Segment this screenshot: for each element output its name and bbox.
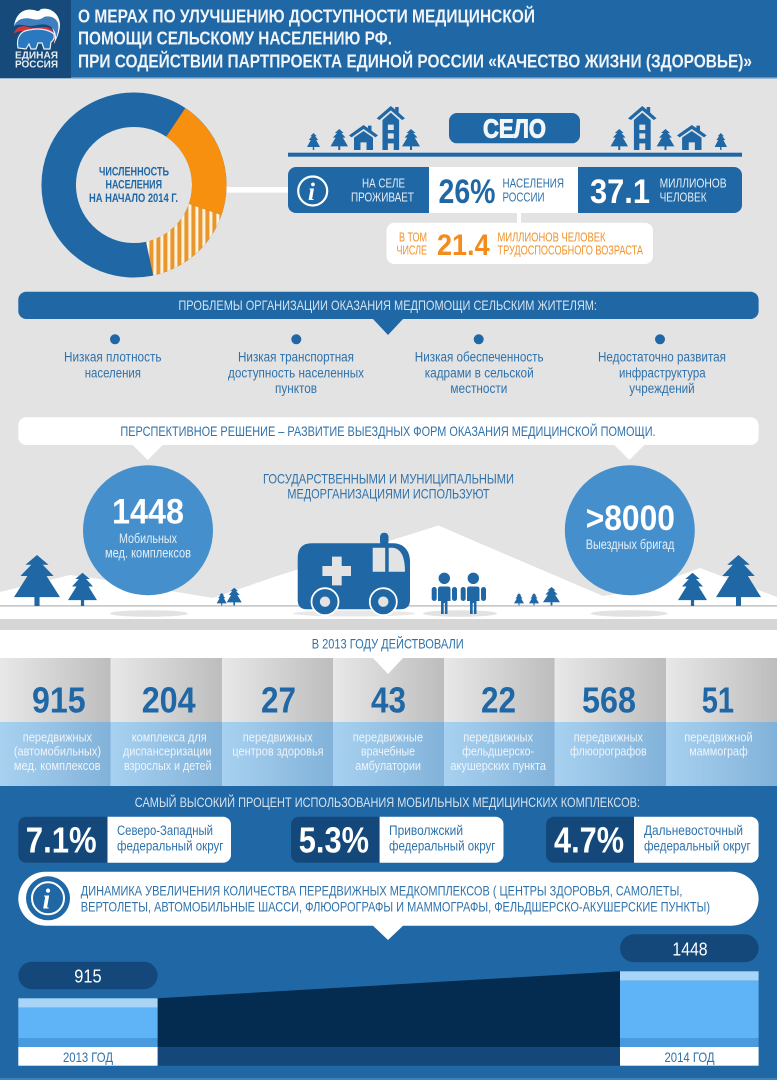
problem 2: Низкая транспортная bbox=[238, 350, 354, 364]
village scene: right houses and trees bbox=[610, 106, 727, 150]
problem 1: населения bbox=[85, 365, 141, 380]
grey strip bbox=[0, 619, 777, 630]
problem 1 bbox=[64, 334, 162, 380]
snowy hills bbox=[0, 526, 777, 606]
circle stat: mobile complexes bbox=[83, 465, 213, 595]
column: 22: акушерских пункта bbox=[450, 758, 547, 773]
problem 4: Недостаточно развитая bbox=[598, 350, 726, 364]
column: 204 bbox=[110, 658, 222, 786]
pointer triangle bbox=[373, 658, 403, 674]
circle stat: field teams bbox=[565, 465, 695, 595]
circle stat: mobile complexes: 1448 bbox=[112, 492, 184, 531]
ground line bbox=[288, 153, 742, 157]
icon: info bbox=[26, 876, 70, 920]
icon: info bbox=[298, 176, 327, 206]
info bar: rural population: НА СЕЛЕ bbox=[362, 176, 405, 190]
column: 43 bbox=[333, 658, 444, 786]
problem 3 bbox=[415, 334, 544, 396]
callout: working age population: В ТОМ bbox=[399, 230, 427, 244]
circle stat: mobile complexes: мед. комплексов bbox=[105, 546, 191, 560]
panel: problems heading: ПРОБЛЕМЫ ОРГАНИЗАЦИИ ОКАЗАНИЯ МЕДПОМОЩИ СЕЛЬСКИМ ЖИТЕЛЯМ: bbox=[178, 297, 597, 313]
problem 3: местности bbox=[450, 381, 507, 396]
problem 3: Низкая обеспеченность bbox=[415, 350, 544, 364]
snowy ground bbox=[0, 605, 777, 619]
stat: 5.3% bbox=[291, 817, 504, 863]
central caption: ГОСУДАРСТВЕННЫМИ И МУНИЦИПАЛЬНЫМИ bbox=[263, 470, 514, 486]
stat: 4.7%: 4.7% bbox=[554, 820, 624, 861]
column: 915 bbox=[0, 658, 110, 786]
column: 27: центров здоровья bbox=[232, 744, 324, 758]
village label bbox=[449, 113, 580, 144]
value pill: 1448: 1448 bbox=[672, 940, 708, 960]
column: 43: амбулатории bbox=[355, 758, 421, 773]
logo: Единая Россия: РОССИЯ bbox=[15, 60, 58, 70]
growth wedge bbox=[158, 971, 620, 1047]
column: 915: передвижных bbox=[23, 730, 92, 744]
column: 51 bbox=[666, 658, 777, 786]
bar: 2014: 2014 ГОД bbox=[664, 1049, 715, 1065]
column: 204: взрослых и детей bbox=[124, 758, 212, 773]
info bar: rural population: 37.1 bbox=[590, 173, 650, 211]
stat: 5.3%: Приволжский bbox=[389, 823, 463, 838]
donut caption: НАСЕЛЕНИЯ bbox=[106, 178, 162, 192]
chart: growth 2013 to 2014 bbox=[18, 934, 759, 1066]
column: 22 bbox=[444, 658, 554, 786]
stat: 5.3%: 5.3% bbox=[299, 820, 369, 861]
donut caption bbox=[89, 164, 178, 205]
column: 43: врачебные bbox=[361, 744, 415, 758]
icon: people bbox=[432, 573, 486, 614]
column: 27: передвижных bbox=[243, 730, 313, 744]
title: ПОМОЩИ СЕЛЬСКОМУ НАСЕЛЕНИЮ РФ. bbox=[78, 28, 392, 49]
column: 43: передвижные bbox=[353, 730, 423, 744]
problem 2: доступность населенных bbox=[228, 365, 364, 380]
column: 51: передвижной bbox=[684, 730, 753, 744]
bar: 2013 bbox=[18, 998, 158, 1066]
logo: Единая Россия bbox=[14, 9, 60, 71]
stat: 4.7%: Дальневосточный bbox=[644, 823, 743, 838]
stat: 7.1%: Северо-Западный bbox=[117, 823, 213, 838]
title: О МЕРАХ ПО УЛУЧШЕНИЮ ДОСТУПНОСТИ МЕДИЦИНСКОЙ bbox=[78, 6, 535, 27]
column: 22: фельдшерско- bbox=[462, 744, 534, 758]
donut caption: НА НАЧАЛО 2014 Г. bbox=[89, 191, 178, 205]
header banner bbox=[0, 0, 777, 78]
info bar: rural population: НАСЕЛЕНИЯ bbox=[502, 176, 564, 190]
callout: working age population: 21.4 bbox=[437, 229, 490, 262]
circle stat: mobile complexes: Мобильных bbox=[119, 531, 177, 546]
column: 43: 43 bbox=[371, 680, 406, 721]
stat: 5.3%: федеральный округ bbox=[389, 838, 496, 853]
logo: Единая Россия: ЕДИНАЯ bbox=[15, 50, 58, 62]
callout: dynamics bbox=[18, 872, 759, 940]
stat: 4.7%: федеральный округ bbox=[644, 838, 751, 853]
circle stat: field teams: >8000 bbox=[586, 499, 675, 538]
central caption: МЕДОРГАНИЗАЦИЯМИ ИСПОЛЬЗУЮТ bbox=[287, 485, 490, 501]
panel: problems heading bbox=[18, 292, 759, 335]
panel: usage and dynamics bbox=[0, 786, 777, 1080]
problem 4 bbox=[598, 334, 726, 396]
column: 22: передвижных bbox=[463, 730, 533, 744]
donut segment: orange bbox=[166, 108, 227, 215]
bar: 2014 bbox=[620, 971, 759, 1066]
trees: right bbox=[514, 555, 761, 606]
connector line: donut to info bar bbox=[222, 187, 290, 193]
column: 915: (автомобильных) bbox=[14, 744, 101, 758]
donut caption: ЧИСЛЕННОСТЬ bbox=[99, 164, 169, 178]
info bar: rural population: РОССИИ bbox=[502, 190, 544, 204]
donut segment: hatched bbox=[146, 204, 222, 276]
village label: СЕЛО bbox=[483, 114, 546, 144]
callout: working age population: ТРУДОСПОСОБНОГО ВОЗРАСТА bbox=[498, 244, 643, 258]
bar: 2013: 2013 ГОД bbox=[63, 1049, 113, 1065]
callout: working age population: ЧИСЛЕ bbox=[396, 244, 427, 258]
problem 2: пунктов bbox=[275, 381, 317, 396]
column: 568: передвижных bbox=[574, 730, 643, 744]
column: 915: 915 bbox=[32, 680, 86, 721]
column: 204: 204 bbox=[142, 680, 196, 721]
problem 4: инфраструктура bbox=[619, 365, 706, 380]
problem 4: учреждений bbox=[629, 381, 695, 396]
column: 915: мед. комплексов bbox=[14, 758, 101, 773]
icon: info: i bbox=[308, 179, 315, 206]
column: 27: 27 bbox=[261, 680, 296, 721]
stat: 4.7% bbox=[546, 817, 759, 863]
column: 568: флюорографов bbox=[570, 744, 647, 758]
problem 1: Низкая плотность bbox=[64, 350, 162, 364]
title bbox=[78, 6, 752, 71]
stat: 7.1%: 7.1% bbox=[26, 820, 97, 861]
donut chart bbox=[59, 108, 227, 275]
panel: promising solution bbox=[18, 417, 759, 460]
trees: left bbox=[14, 555, 242, 606]
info bar: rural population: ПРОЖИВАЕТ bbox=[351, 190, 414, 204]
circle stat: field teams: Выездных бригад bbox=[586, 537, 674, 552]
column: 568 bbox=[554, 658, 666, 786]
value pill: 915 bbox=[18, 962, 158, 989]
heading: В 2013 ГОДУ ДЕЙСТВОВАЛИ bbox=[312, 634, 464, 652]
column: 204: комплекса для bbox=[132, 730, 207, 744]
icon: ambulance bbox=[298, 533, 410, 615]
column: 568: 568 bbox=[582, 680, 636, 721]
heading: highest usage: САМЫЙ ВЫСОКИЙ ПРОЦЕНТ ИСПОЛЬЗОВАНИЯ МОБИЛЬНЫХ МЕДИЦИНСКИХ КОМПЛЕКСОВ: bbox=[135, 793, 640, 810]
panel: 2013 statistics bbox=[0, 630, 777, 786]
stat: 7.1%: федеральный округ bbox=[117, 838, 224, 853]
column: 51: маммограф bbox=[689, 744, 748, 758]
problem 2 bbox=[228, 334, 364, 396]
column: 51: 51 bbox=[702, 680, 734, 721]
value pill: 1448 bbox=[620, 934, 759, 962]
stat: 7.1% bbox=[18, 817, 231, 863]
callout: working age population: МИЛЛИОНОВ ЧЕЛОВЕК bbox=[498, 230, 606, 244]
village scene: left houses and trees bbox=[307, 106, 420, 150]
info bar: rural population: МИЛЛИОНОВ bbox=[660, 176, 727, 190]
callout: working age population bbox=[386, 223, 653, 264]
connector line: info bar to callout bbox=[517, 213, 521, 223]
info bar: rural population bbox=[288, 167, 742, 213]
central caption bbox=[263, 470, 514, 501]
column: 22: 22 bbox=[481, 680, 516, 721]
info bar: rural population: 26% bbox=[438, 173, 496, 211]
column: 204: диспансеризации bbox=[123, 744, 212, 758]
icon: info: i bbox=[42, 884, 50, 916]
value pill: 915: 915 bbox=[74, 966, 102, 986]
column: 27 bbox=[222, 658, 333, 786]
info bar: rural population: ЧЕЛОВЕК bbox=[660, 190, 707, 204]
problem 3: кадрами в сельской bbox=[425, 365, 534, 380]
